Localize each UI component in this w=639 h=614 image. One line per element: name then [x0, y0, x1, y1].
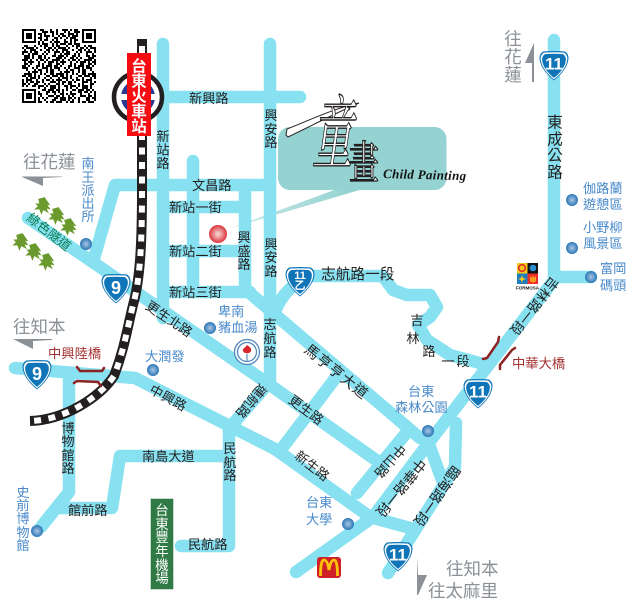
- road labels: 南島大道: [142, 449, 195, 464]
- map dots: [31, 194, 597, 537]
- highway shield 11 yi: [286, 267, 314, 296]
- bridges: [74, 337, 515, 386]
- road labels: 志航路一段: [321, 266, 395, 283]
- place labels: 伽路蘭: [583, 181, 623, 196]
- place labels: 台東: [306, 495, 332, 510]
- highway shield 9 west: 9: [32, 364, 42, 384]
- place labels: 卑南: [218, 303, 244, 319]
- direction arrows and destinations: 往太麻里: [428, 581, 498, 601]
- highway shield 9 north: [102, 274, 130, 304]
- road labels: 中山路: [371, 441, 409, 481]
- highway shield 11 south: [384, 542, 412, 572]
- railway line: [30, 39, 142, 421]
- road labels: 新興路: [189, 91, 229, 106]
- logo: child painting: [286, 70, 467, 191]
- road labels: 民航路: [188, 537, 228, 552]
- place labels: 遊憩區: [583, 196, 623, 212]
- place labels: 豬血湯: [218, 320, 258, 335]
- highway shield 9 west: [22, 360, 52, 390]
- logo: child painting: 畫: [349, 127, 379, 191]
- road labels: 文昌路: [192, 178, 232, 193]
- direction arrows and destinations: 往花蓮: [504, 29, 522, 85]
- logo: child painting: Child Painting: [383, 166, 467, 183]
- icon: mcdonald's: [317, 557, 341, 578]
- red location pin: [209, 225, 227, 243]
- place labels: 富岡: [600, 260, 626, 276]
- road labels: [24, 91, 563, 552]
- place labels: 森林公園: [395, 400, 448, 415]
- road labels: 東成公路: [547, 114, 563, 182]
- place labels: 風景區: [583, 236, 623, 251]
- road labels: 新站一街: [169, 200, 222, 215]
- direction arrows and destinations: [13, 29, 534, 601]
- road labels: 馬亨亨大道: [301, 341, 372, 403]
- road labels: 一: [441, 354, 455, 369]
- road labels: 新站二街: [169, 244, 222, 259]
- direction arrows and destinations: 往花蓮: [23, 152, 76, 172]
- road labels: 志航路: [263, 317, 277, 360]
- highway shield 11 yi: 11: [294, 270, 306, 282]
- road labels: 臨海路一段: [410, 463, 464, 529]
- place labels: [16, 156, 626, 553]
- direction arrows and destinations: 往知本: [446, 559, 498, 579]
- icon: formosa fun coast logo: FORMOSA: [516, 286, 540, 290]
- road network: [15, 40, 591, 573]
- place labels: 南王派出所: [81, 156, 95, 224]
- road labels: 路: [422, 344, 436, 359]
- road labels: 連航路: [233, 381, 269, 421]
- highway shield 9 north: 9: [111, 278, 121, 298]
- road labels: 館前路: [68, 502, 108, 518]
- place labels: 台東: [408, 384, 434, 399]
- road labels: 更生路: [286, 392, 326, 428]
- road labels: 新生路: [292, 448, 332, 484]
- road labels: 林: [406, 331, 420, 346]
- airport label: [150, 498, 174, 590]
- road labels: 興安路: [264, 237, 278, 279]
- highway shield 11 central: 11: [469, 382, 487, 402]
- road labels: 中華路一段: [373, 456, 429, 520]
- road labels: 段: [456, 354, 470, 369]
- logo: child painting: 童: [309, 70, 365, 186]
- road labels: 吉: [410, 313, 424, 328]
- bridge labels: [48, 346, 565, 371]
- highway shield 11 north: 11: [545, 54, 563, 74]
- road labels: 綠色隧道: [24, 210, 74, 254]
- place labels: 碼頭: [600, 278, 626, 293]
- icon: formosa fun coast logo: [516, 263, 540, 290]
- direction arrows and destinations: 往知本: [13, 317, 66, 337]
- icon: torch emblem: [234, 340, 260, 364]
- icon: green tunnel trees: [12, 196, 78, 272]
- place labels: 大潤發: [145, 349, 185, 364]
- road labels: 新站三街: [169, 285, 222, 300]
- taitung railway station marker: [114, 53, 162, 136]
- logo backdrop callout: [231, 127, 446, 228]
- highway shield 11 central: [464, 379, 492, 408]
- place labels: 大學: [306, 512, 332, 527]
- place labels: 小野柳: [583, 220, 623, 235]
- road labels: 興盛路: [237, 230, 251, 272]
- road labels: 吉林路一段: [507, 274, 561, 338]
- road labels: 中興路: [147, 382, 189, 414]
- highway shield 11 south: 11: [389, 546, 407, 564]
- road labels: 興安路: [264, 108, 278, 150]
- QR code: [22, 29, 96, 103]
- bridge labels: 中華大橋: [512, 356, 565, 371]
- road labels: 民航路: [223, 441, 237, 483]
- airport label: 台東豐年機場: [155, 503, 169, 586]
- road labels: 博物館路: [61, 420, 75, 476]
- place labels: 史前博物館: [16, 485, 30, 553]
- taitung railway station marker: 台東火車站: [131, 56, 147, 136]
- road labels: 更生北路: [143, 298, 195, 340]
- bridge labels: 中興陸橋: [48, 346, 101, 361]
- road labels: 新站路: [156, 129, 170, 171]
- highway shield 11 north: [540, 51, 568, 80]
- highway shield 11 yi: 乙: [294, 279, 306, 292]
